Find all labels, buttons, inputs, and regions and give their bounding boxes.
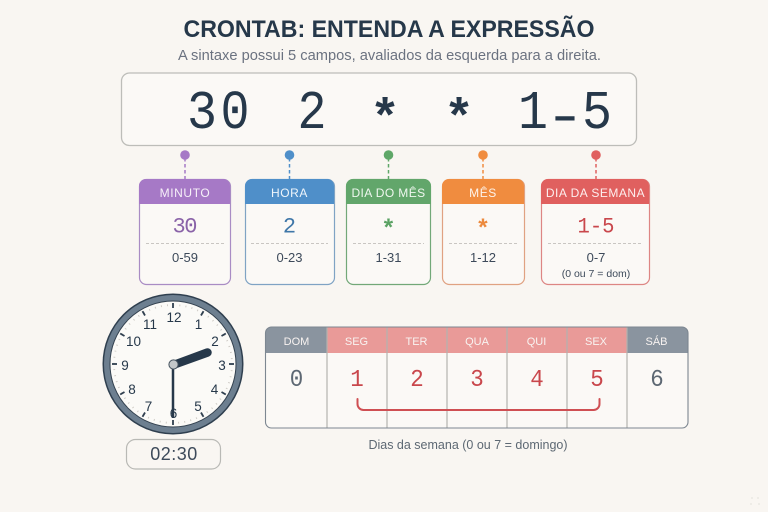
panel: mes: 1-12	[470, 250, 496, 265]
weekday numbers: 2	[410, 367, 424, 394]
panel: cron expression: 5	[582, 82, 612, 145]
panel: minuto: 30	[172, 214, 198, 240]
panel: dia da semana: 1-5	[578, 214, 614, 240]
panel: dia do mes	[346, 179, 431, 284]
weekday table	[266, 327, 688, 428]
weekday headers: SEG	[345, 336, 368, 348]
panel: cron expression: 0	[220, 82, 250, 145]
digital time: 02:30	[150, 444, 198, 464]
subtitle: A sintaxe possui 5 campos, avaliados da esquerda para a direita.	[178, 47, 601, 64]
panel: dia da semana: 0-7	[587, 250, 605, 265]
panel: cron expression: 3	[187, 82, 217, 145]
panel: hora: 2	[283, 214, 296, 240]
weekday numbers: 6	[650, 367, 664, 394]
clock	[102, 294, 244, 434]
weekday headers: DOM	[284, 336, 309, 348]
weekday headers: TER	[406, 336, 428, 348]
clock numerals: 11	[143, 317, 157, 332]
weekday numbers: 3	[470, 367, 484, 394]
weekday headers: SÁB	[645, 335, 668, 348]
connector: dia do mes	[384, 150, 393, 179]
panel: dia da semana	[541, 179, 650, 284]
panel: dia da semana: (0 ou 7 = dom)	[562, 268, 630, 280]
clock hands	[172, 364, 174, 418]
clock numerals: 5	[194, 399, 202, 414]
panel: cron expression: -	[544, 87, 586, 150]
weekday numbers: 0	[290, 367, 303, 394]
panel: cron expression	[122, 73, 636, 150]
clock numerals: 12	[166, 310, 182, 325]
clock numerals: 3	[218, 358, 226, 373]
panel: minuto	[139, 179, 230, 284]
panel: minuto: 0-59	[172, 250, 198, 265]
weekday headers	[284, 335, 668, 348]
weekday headers: SEX	[585, 336, 608, 348]
weekday numbers: 5	[590, 367, 604, 394]
panel: dia da semana: DIA DA SEMANA	[546, 186, 645, 200]
table caption: Dias da semana (0 ou 7 = domingo)	[368, 438, 568, 452]
weekday headers: QUI	[527, 336, 546, 348]
connector: dia da semana	[591, 150, 601, 179]
clock numerals: 10	[126, 334, 141, 349]
weekday headers: QUA	[465, 336, 490, 348]
clock numerals: 9	[121, 358, 129, 373]
clock numerals	[121, 310, 226, 421]
panel: dia do mes: *	[381, 217, 396, 244]
panel: mes: *	[476, 217, 490, 244]
bracket: seg a sex	[358, 399, 600, 410]
panel: cron expression: 2	[298, 82, 326, 145]
clock numerals: 4	[211, 382, 219, 397]
digital time	[126, 440, 220, 469]
panel: dia do mes: DIA DO MÊS	[351, 185, 426, 200]
clock minute dots	[114, 305, 232, 423]
panel: cron expression: *	[370, 92, 400, 150]
panel: hora: 0-23	[276, 250, 303, 265]
watermark mark	[751, 498, 759, 505]
weekday numbers	[290, 367, 664, 394]
clock numerals: 2	[211, 334, 219, 349]
clock numerals: 7	[145, 399, 152, 414]
weekday numbers: 4	[530, 367, 544, 394]
panel: hora: HORA	[271, 186, 308, 200]
connector: mes	[478, 150, 488, 179]
connector: hora	[285, 150, 294, 179]
panel: dia do mes: 1-31	[375, 250, 402, 265]
clock numerals: 6	[170, 406, 177, 421]
clock numerals: 1	[195, 317, 202, 332]
panel: cron expression: *	[444, 92, 474, 150]
panel: mes: MÊS	[469, 185, 497, 200]
panel: minuto: MINUTO	[160, 186, 210, 200]
panel: mes	[442, 179, 524, 284]
connector: minuto	[180, 150, 190, 179]
title: CRONTAB: ENTENDA A EXPRESSÃO	[184, 15, 594, 43]
weekday numbers: 1	[350, 367, 364, 394]
panel: hora	[245, 179, 334, 284]
clock hour ticks	[112, 303, 234, 425]
panel: cron expression: 1	[518, 82, 548, 145]
clock numerals: 8	[128, 382, 136, 397]
